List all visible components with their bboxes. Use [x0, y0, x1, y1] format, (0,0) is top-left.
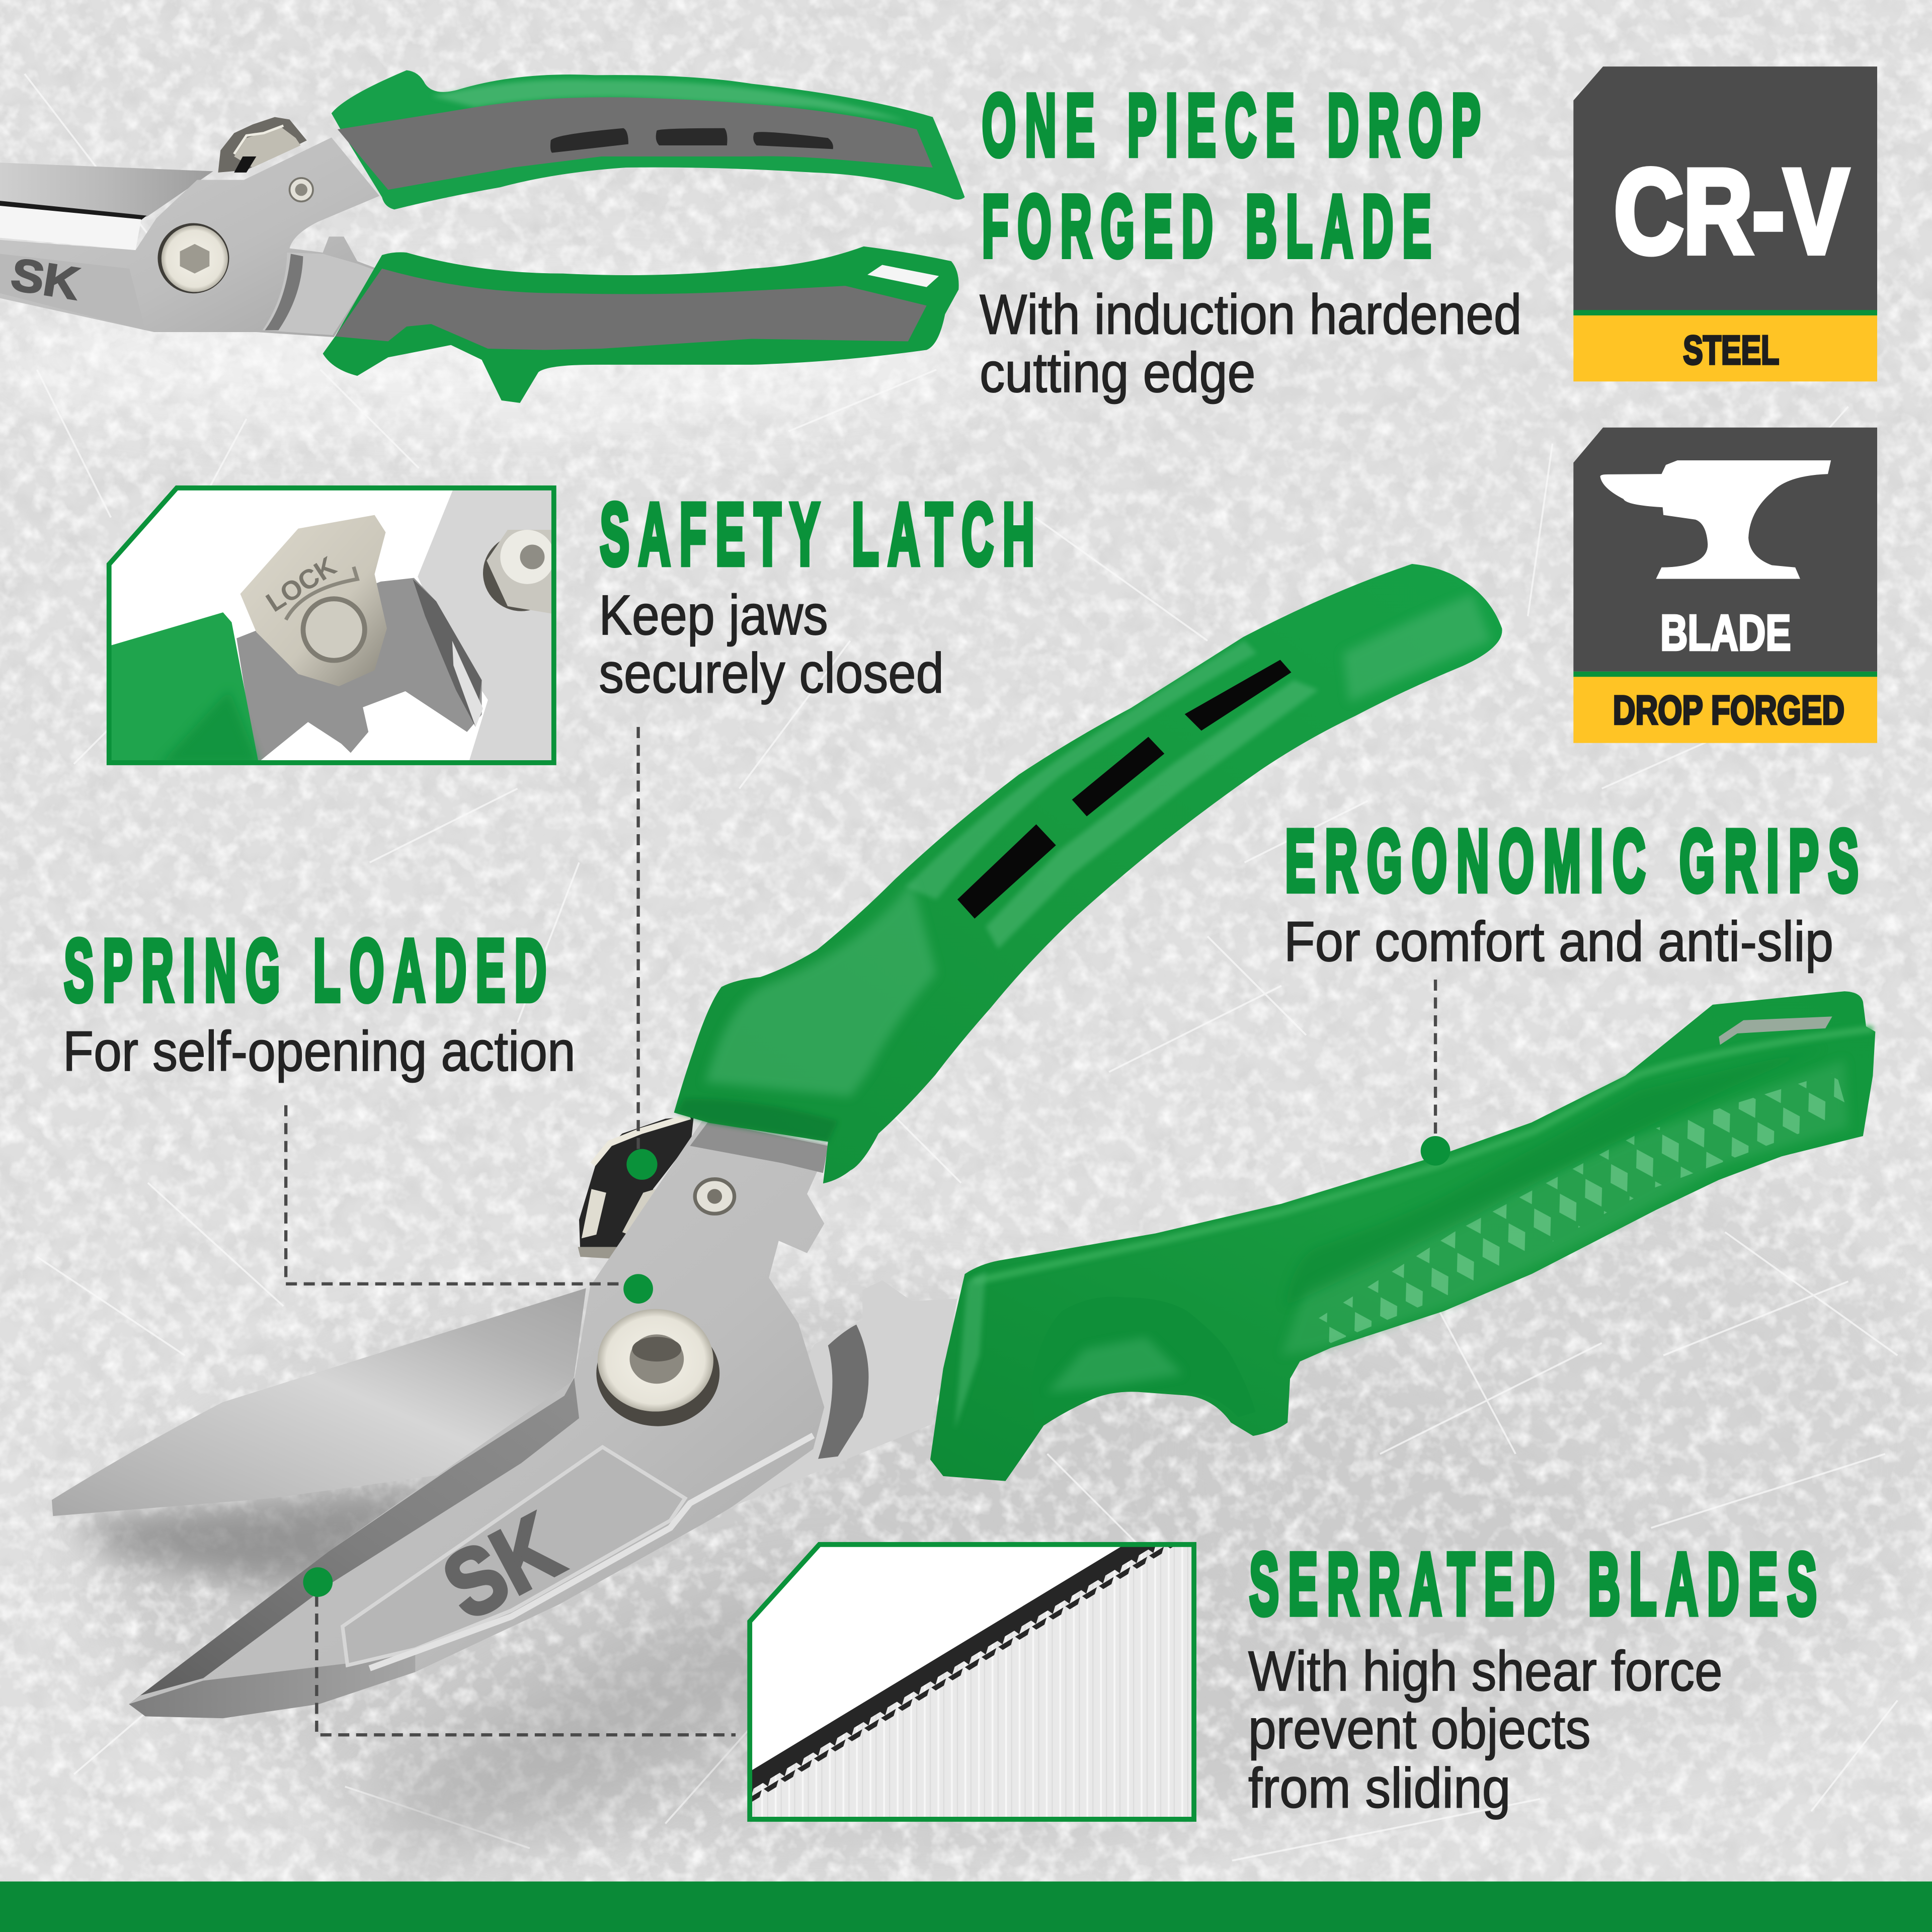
left face highlight: [955, 1271, 986, 1429]
text: serrated description: With high shear force: [1248, 1639, 1723, 1703]
inset: gray arm: [236, 578, 482, 764]
inset: serrated blades: [731, 1464, 1272, 1821]
heading: one piece drop forged blade: FORGED BLADE: [982, 177, 1440, 275]
text: safety latch description: Keep jaws: [599, 583, 828, 647]
icon: anvil: [1600, 460, 1831, 579]
text: safety latch description: [599, 583, 944, 704]
lower edge highlight: [370, 1435, 813, 1668]
top tool SK logo: SK: [8, 249, 83, 309]
callout: spring loaded leader: [286, 1105, 653, 1304]
inset: nut: [483, 530, 559, 614]
diamond texture band: [1281, 1060, 1848, 1355]
inset: safety latch: [106, 486, 559, 764]
grip slots: [957, 660, 1292, 919]
SK logo: SK: [428, 1494, 577, 1640]
top tool pivot disc: [157, 223, 229, 293]
top tool grip slots: [550, 128, 833, 153]
top tool rivet: [290, 178, 313, 201]
main tool illustration: [52, 564, 1875, 1718]
finger recess: [1031, 1297, 1256, 1423]
upper grip: [674, 564, 1502, 1183]
recessed blade panel: [343, 1447, 685, 1665]
lower grip: [930, 991, 1875, 1481]
top tool lower handle: [323, 247, 959, 403]
lighter top ridge: [974, 1029, 1873, 1281]
top tool illustration: [0, 70, 965, 403]
heading: spring loaded: SPRING LOADED: [64, 922, 555, 1019]
pivot disc: [596, 1309, 719, 1426]
badge: drop forged blade: BLADE: [1660, 605, 1791, 661]
badge: drop forged blade: DROP FORGED: [1613, 688, 1844, 733]
text: induction hardened: With induction hardened: [980, 283, 1521, 346]
heading: one piece drop forged blade: [982, 76, 1490, 275]
text: serrated description: prevent objects: [1248, 1697, 1591, 1760]
text: spring description: For self-opening action: [63, 1019, 576, 1083]
rivet: [695, 1179, 735, 1214]
top tool blades: [0, 163, 213, 250]
inset: lock lever: LOCK: [261, 551, 342, 618]
badge: CR-V steel: CR-V: [1614, 145, 1848, 278]
lanyard hole: [1719, 1016, 1832, 1045]
inset: lock lever: [240, 515, 387, 686]
heading: safety latch: SAFETY LATCH: [600, 486, 1043, 583]
badge: CR-V steel: STEEL: [1683, 328, 1779, 373]
forged head and lower blade: [129, 1119, 829, 1718]
head ridge top: [690, 1121, 828, 1173]
upper blade: [52, 1288, 586, 1516]
text: induction hardened: cutting edge: [980, 341, 1256, 404]
inset: green grip: [106, 612, 259, 764]
callout: ergonomic grips leader: [1421, 980, 1450, 1166]
upper grip light facets: [702, 881, 936, 1097]
text: ergonomic description: For comfort and anti-slip: [1284, 910, 1833, 973]
top tool adjuster latch: [218, 117, 307, 173]
rear handle metal: [732, 1280, 957, 1507]
top tool lanyard hole: [867, 265, 939, 287]
callout: safety latch leader: [626, 727, 658, 1180]
blade bevel: [129, 1378, 579, 1704]
shadow beneath the main tool: [68, 1485, 902, 1906]
footer bar: [0, 1882, 1932, 1932]
text: serrated description: [1248, 1639, 1723, 1820]
top tool metal head: [0, 137, 379, 337]
blade tip shading: [129, 1651, 415, 1718]
top tool upper handle: [332, 70, 965, 209]
inset: right metal body: [418, 486, 557, 764]
badge: drop forged blade: [1573, 428, 1877, 743]
text: safety latch description: securely closed: [599, 641, 944, 704]
text: serrated description: from sliding: [1248, 1756, 1510, 1820]
callout: serrated blades leader: [303, 1567, 736, 1735]
badge: CR-V steel: [1573, 66, 1877, 381]
latch mechanism: [578, 1116, 694, 1259]
text: induction hardened: [980, 283, 1521, 404]
